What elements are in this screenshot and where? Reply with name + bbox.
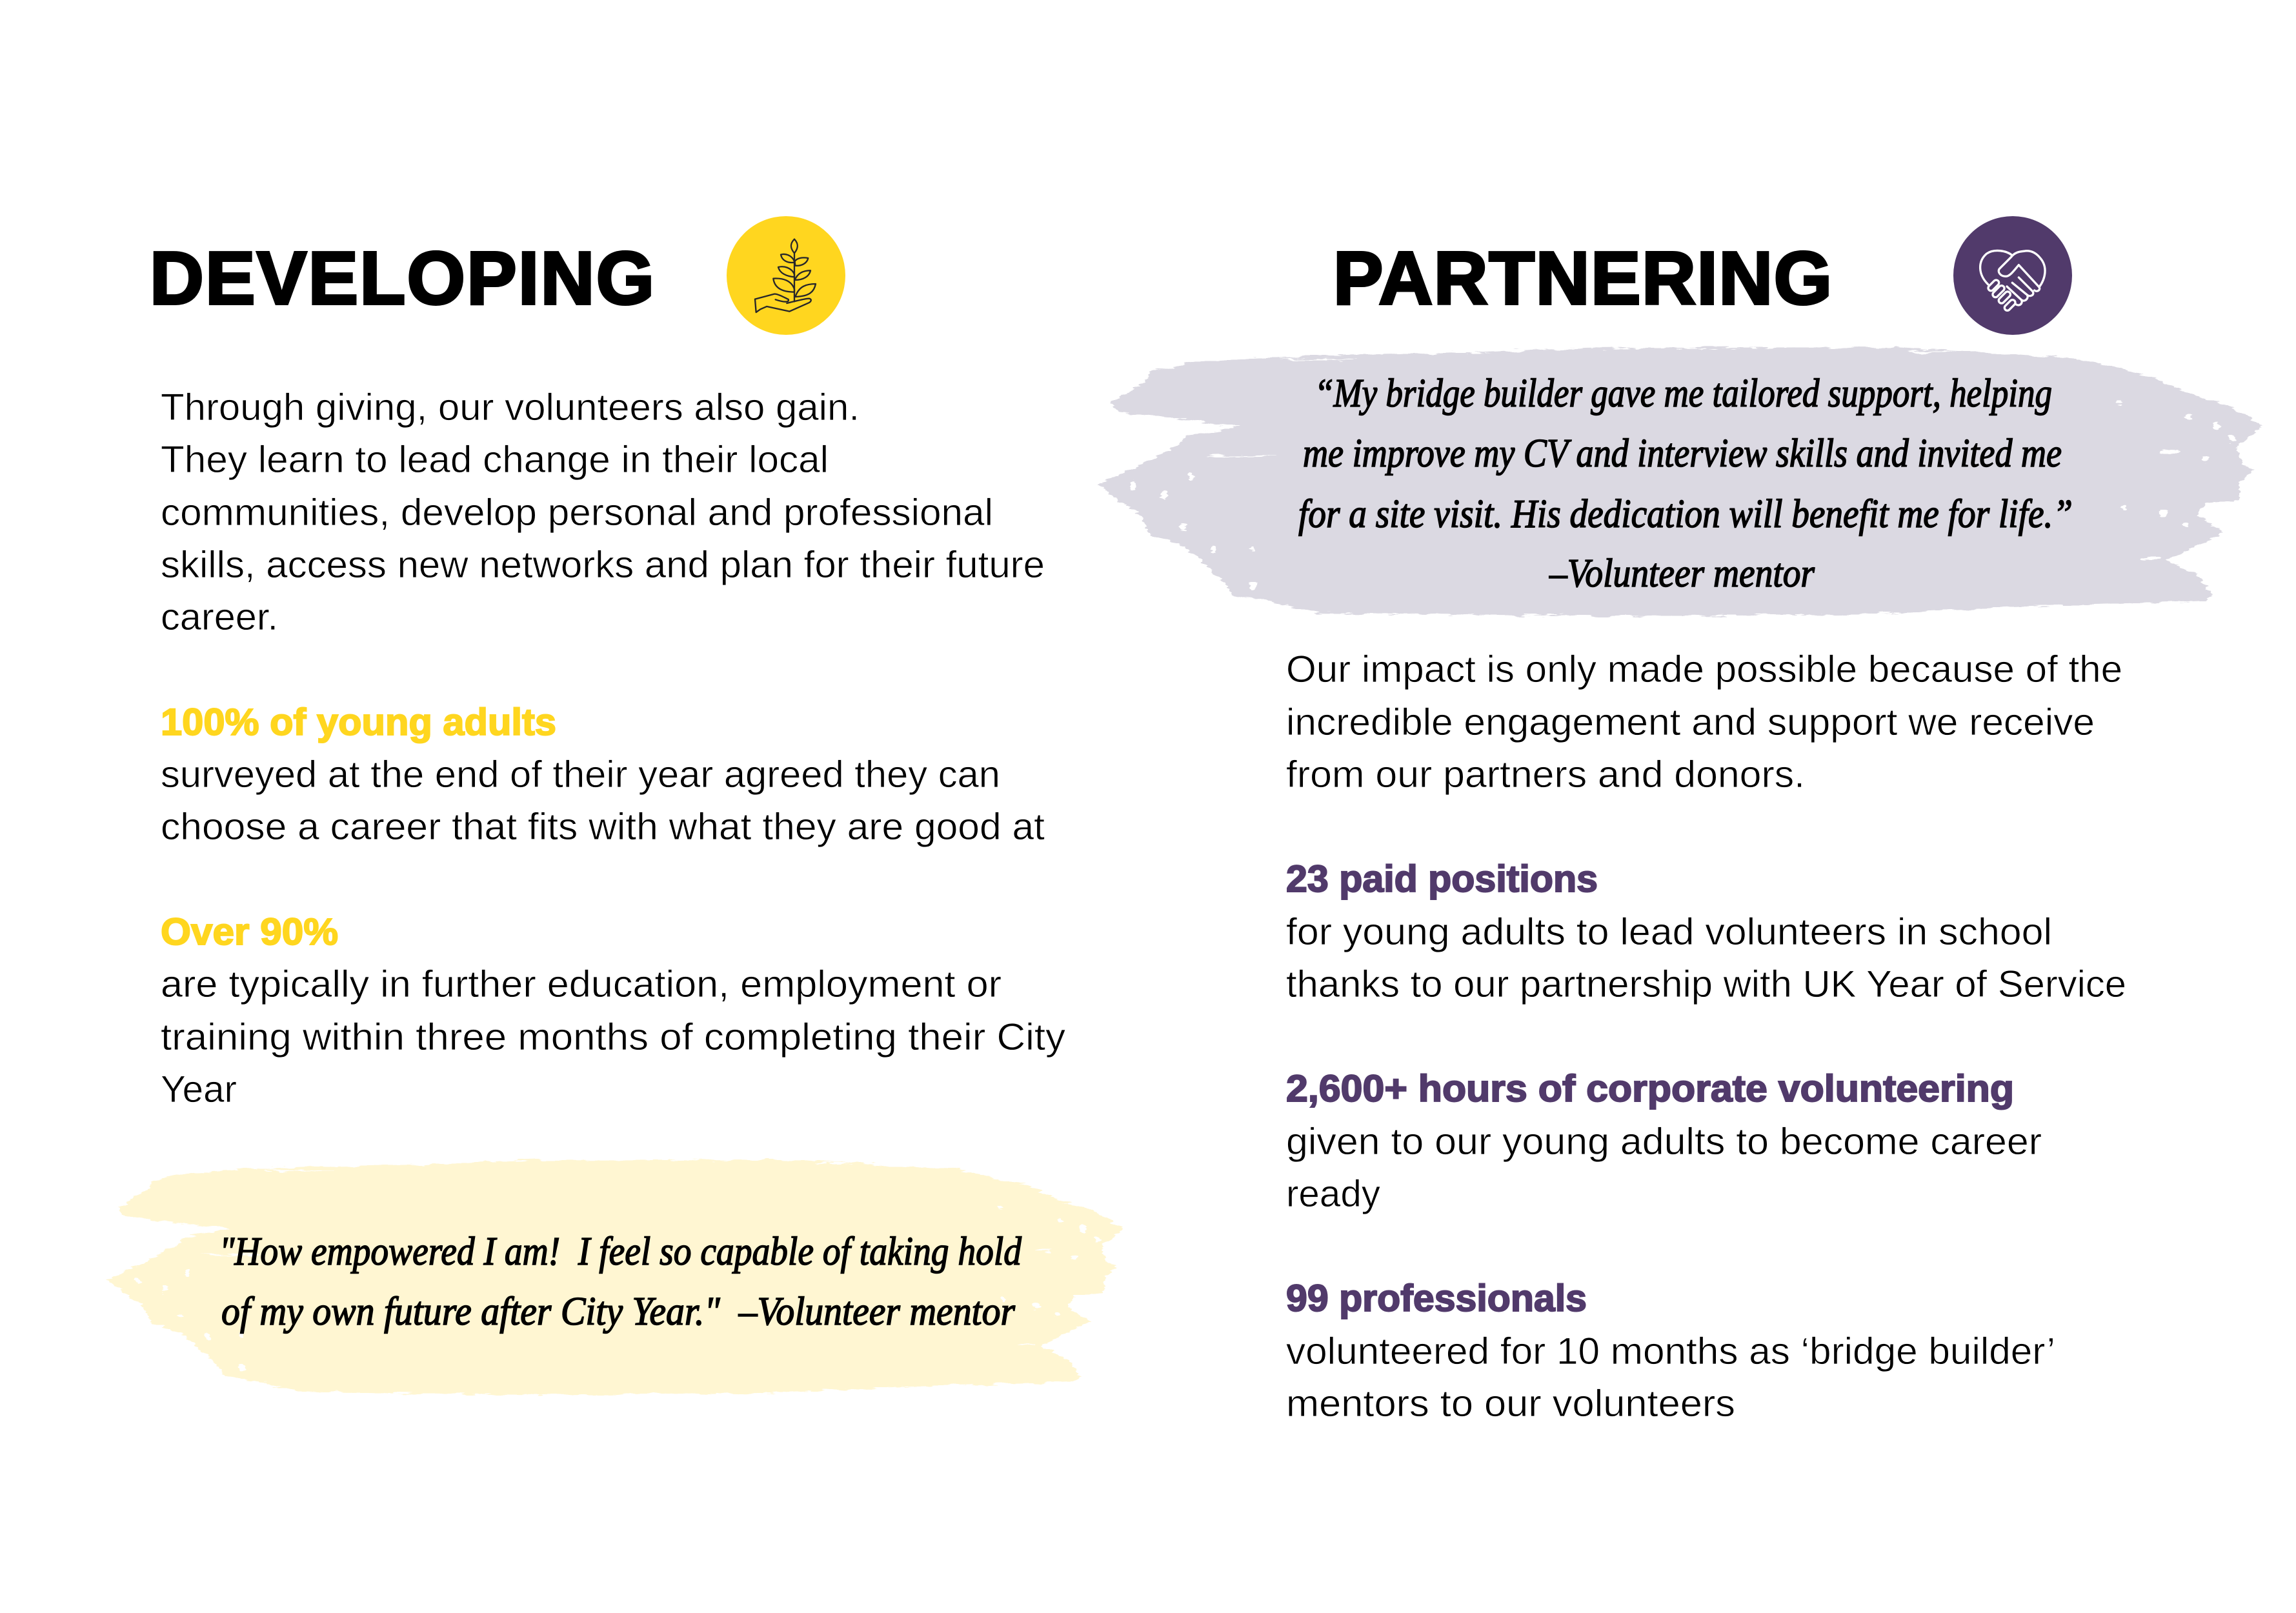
body text: developing intro: career. (161, 596, 278, 638)
body text: partnering intro: from our partners and donors. (1286, 754, 1805, 796)
callout: yellow brush quote (107, 1159, 1124, 1394)
body text: developing intro: skills, access new networks and plan for their future (161, 544, 1045, 586)
body text: developing intro: Through giving, our volunteers also gain. (161, 386, 860, 428)
stat: 23 paid positions: for young adults to lead volunteers in school (1286, 911, 2052, 953)
callout: yellow brush quote: "How empowered I am! I feel so capable of taking hold (219, 1230, 1022, 1274)
stat: 100% of young adults: choose a career that fits with what they are good at (161, 806, 1045, 848)
stat: 100% of young adults: 100% of young adults (161, 701, 556, 743)
stat: 23 paid positions (1286, 858, 2126, 1005)
stat: 99 professionals: 99 professionals (1286, 1277, 1587, 1319)
icon: plant in hand (727, 216, 845, 335)
stat: 100% of young adults: surveyed at the end of their year agreed they can (161, 754, 1000, 796)
heading: developing: DEVELOPING (150, 236, 654, 320)
stat: 2,600+ hours: 2,600+ hours of corporate volunteering (1286, 1068, 2014, 1110)
stat: 99 professionals: mentors to our volunteers (1286, 1383, 1735, 1425)
body text: partnering intro: Our impact is only made possible because of the (1286, 648, 2122, 690)
stat: 99 professionals: volunteered for 10 months as ‘bridge builder’ (1286, 1330, 2055, 1372)
stat: over 90% (161, 911, 1065, 1110)
stat: over 90%: training within three months of completing their City (161, 1016, 1065, 1058)
stat: over 90%: Year (161, 1068, 237, 1110)
stat: 2,600+ hours: ready (1286, 1173, 1380, 1215)
callout: yellow brush quote: of my own future after City Year." –Volunteer mentor (221, 1290, 1016, 1334)
stat: over 90%: are typically in further education, employment or (161, 963, 1002, 1005)
stat: 100% of young adults (161, 701, 1045, 848)
heading: partnering: PARTNERING (1333, 236, 1832, 320)
body text: partnering intro: incredible engagement and support we receive (1286, 701, 2095, 743)
stat: 2,600+ hours (1286, 1068, 2042, 1215)
callout: grey brush quote: me improve my CV and interview skills and invited me (1303, 432, 2062, 476)
stat: 23 paid positions: 23 paid positions (1286, 858, 1598, 900)
body text: partnering intro (1286, 648, 2122, 796)
icon: handshake heart (1953, 216, 2072, 335)
callout: grey brush quote (1098, 347, 2262, 616)
body text: developing intro (161, 386, 1045, 638)
stat: 99 professionals (1286, 1277, 2055, 1425)
callout: grey brush quote: –Volunteer mentor (1549, 552, 1815, 596)
stat: over 90%: Over 90% (161, 911, 338, 953)
stat: 2,600+ hours: given to our young adults to become career (1286, 1121, 2042, 1163)
body text: developing intro: They learn to lead change in their local (161, 439, 829, 481)
callout: grey brush quote: for a site visit. His dedication will benefit me for life.” (1298, 492, 2073, 536)
body text: developing intro: communities, develop personal and professional (161, 492, 993, 534)
stat: 23 paid positions: thanks to our partnership with UK Year of Service (1286, 963, 2126, 1005)
callout: grey brush quote: “My bridge builder gave me tailored support, helping (1314, 372, 2052, 416)
